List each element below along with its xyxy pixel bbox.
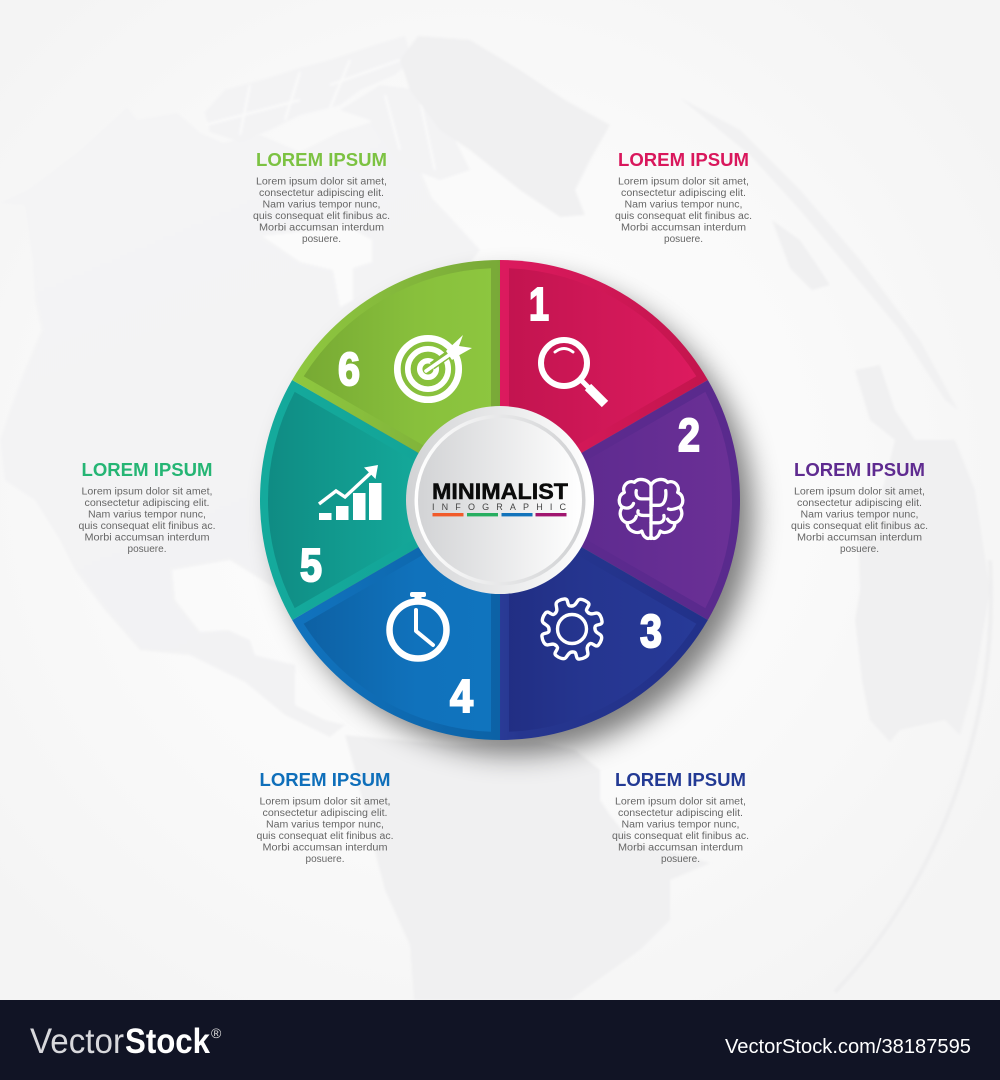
- text block: step 2: consectetur adipiscing elit.: [797, 498, 922, 509]
- text block: step 4: consectetur adipiscing elit.: [262, 808, 388, 819]
- text block: step 4: Lorem ipsum dolor sit amet,: [260, 796, 390, 808]
- text block: step 6: LOREM IPSUM: [256, 150, 387, 170]
- text block: step 5: consectetur adipiscing elit.: [84, 498, 210, 509]
- text block: step 3: consectetur adipiscing elit.: [618, 808, 743, 819]
- text block: step 1: Morbi accumsan interdum: [621, 222, 746, 234]
- footer registered mark: ®: [211, 1025, 222, 1041]
- text block: step 5: LOREM IPSUM: [82, 460, 212, 480]
- panel: segment 6 green: [292, 260, 500, 500]
- text block: step 6: consectetur adipiscing elit.: [259, 188, 384, 199]
- wheel drop shadow: [277, 278, 753, 754]
- text block: step 5: Nam varius tempor nunc,: [88, 510, 206, 520]
- footer logo: Vector: [30, 1022, 124, 1061]
- text block: step 6: quis consequat elit finibus ac.: [253, 211, 390, 222]
- hub title: MINIMALIST: [432, 479, 568, 504]
- text block: step 2: Nam varius tempor nunc,: [800, 510, 918, 520]
- text block: step 4: Morbi accumsan interdum: [262, 842, 388, 854]
- footer url: VectorStock.com/38187595: [725, 1036, 971, 1058]
- text block: step 6: Lorem ipsum dolor sit amet,: [256, 176, 387, 188]
- number 6: 6: [338, 343, 360, 395]
- panel: segment 2 purple: [500, 380, 740, 620]
- text block: step 1: quis consequat elit finibus ac.: [615, 211, 752, 222]
- text block: step 5: [78, 460, 216, 555]
- text block: step 5: posuere.: [128, 544, 166, 555]
- footer logo bold part: Stock: [125, 1022, 210, 1061]
- text block: step 1: LOREM IPSUM: [618, 150, 749, 170]
- text block: step 4: Nam varius tempor nunc,: [266, 820, 384, 830]
- text block: step 5: Lorem ipsum dolor sit amet,: [82, 486, 212, 498]
- text block: step 3: posuere.: [661, 854, 700, 865]
- icon: brain: [619, 479, 683, 538]
- text block: step 2: [791, 460, 928, 555]
- text block: step 1: Lorem ipsum dolor sit amet,: [618, 176, 749, 188]
- icon: magnifying glass: [541, 340, 605, 404]
- icon: growth chart: [319, 465, 382, 520]
- text block: step 4: quis consequat elit finibus ac.: [256, 831, 394, 842]
- text block: step 4: [256, 770, 394, 865]
- number 3: 3: [640, 605, 662, 657]
- text block: step 3: Nam varius tempor nunc,: [622, 820, 740, 830]
- text block: step 2: posuere.: [840, 544, 879, 555]
- text block: step 4: posuere.: [306, 854, 344, 865]
- text block: step 3: Lorem ipsum dolor sit amet,: [615, 796, 746, 808]
- text block: step 6: Morbi accumsan interdum: [259, 222, 384, 234]
- text block: step 2: Lorem ipsum dolor sit amet,: [794, 486, 925, 498]
- hub color bars: [432, 513, 566, 516]
- panel: segment 3 navy: [500, 500, 708, 740]
- text block: step 4: LOREM IPSUM: [260, 770, 390, 790]
- icon: target with arrow: [397, 335, 472, 400]
- icon: gear: [539, 596, 605, 662]
- center hub: [406, 406, 594, 594]
- text block: step 3: [612, 770, 749, 865]
- text block: step 2: Morbi accumsan interdum: [797, 532, 922, 544]
- hub subtitle: INFOGRAPHIC: [432, 502, 566, 512]
- text block: step 2: LOREM IPSUM: [794, 460, 925, 480]
- icon: stopwatch: [390, 592, 446, 658]
- text block: step 5: Morbi accumsan interdum: [84, 532, 210, 544]
- number 2: 2: [678, 409, 700, 461]
- text block: step 1: Nam varius tempor nunc,: [624, 200, 742, 210]
- text block: step 6: Nam varius tempor nunc,: [262, 200, 380, 210]
- number 4: 4: [450, 670, 473, 722]
- footer bar: [0, 1000, 1000, 1080]
- text block: step 3: quis consequat elit finibus ac.: [612, 831, 749, 842]
- text block: step 2: quis consequat elit finibus ac.: [791, 521, 928, 532]
- text block: step 5: quis consequat elit finibus ac.: [78, 521, 216, 532]
- text block: step 3: LOREM IPSUM: [615, 770, 746, 790]
- text block: step 1: consectetur adipiscing elit.: [621, 188, 746, 199]
- text block: step 1: posuere.: [664, 234, 703, 245]
- number 5: 5: [300, 539, 322, 591]
- number 1: 1: [529, 278, 549, 330]
- text block: step 3: Morbi accumsan interdum: [618, 842, 743, 854]
- panel: segment 1 red: [500, 260, 708, 500]
- panel: segment 4 blue: [292, 500, 500, 740]
- text block: step 6: posuere.: [302, 234, 341, 245]
- text block: step 6: [253, 150, 390, 245]
- text block: step 1: [615, 150, 752, 245]
- panel: segment 5 teal: [260, 380, 500, 620]
